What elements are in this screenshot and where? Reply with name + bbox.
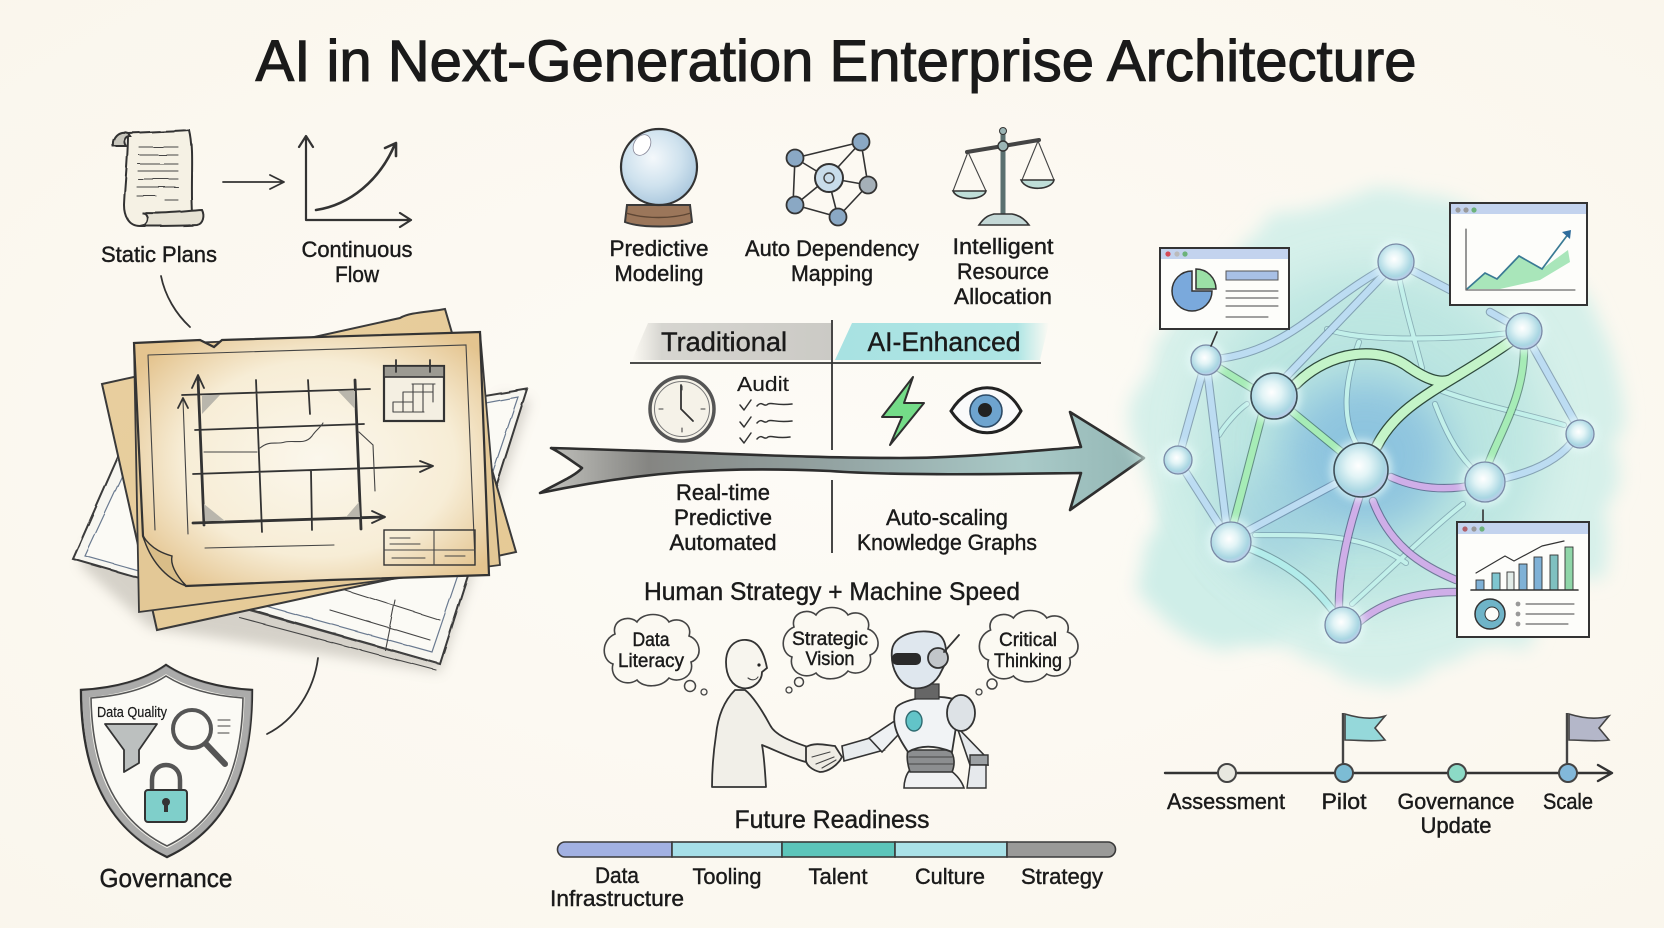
panel: human and machine [604, 578, 1078, 788]
label: Strategy: Strategy [1021, 864, 1103, 889]
icon: eye [951, 388, 1021, 433]
timeline axis arrow [1165, 765, 1612, 781]
label: Intelligent Resource Allocation: Resource [957, 259, 1049, 284]
label: Auto-scaling Knowledge Graphs: Auto-scaling [886, 505, 1008, 530]
figure: robot [842, 631, 988, 788]
label: Talent: Talent [808, 864, 868, 889]
icon: magnifier [173, 710, 230, 764]
label: Continuous Flow: Continuous [302, 237, 412, 262]
heading: Future Readiness: Future Readiness [734, 806, 930, 834]
dashboard window: pie chart [1160, 248, 1289, 329]
schedule grid drawing [178, 375, 433, 548]
figure: human [712, 640, 808, 787]
label: Intelligent Resource Allocation: Allocation [954, 284, 1052, 309]
blue tubes [1178, 262, 1575, 535]
panel: roadmap timeline [1165, 713, 1612, 838]
arrow: transformation [540, 412, 1144, 510]
label: Real-time Predictive Automated: Automated [670, 530, 776, 555]
label: Data Infrastructure: Infrastructure [550, 886, 684, 911]
connector: plans to document stack [161, 276, 190, 327]
thought bubble: Data Literacy: Data [632, 630, 670, 651]
label: Governance: Governance [100, 863, 232, 893]
label: Data Infrastructure: Data [595, 863, 640, 888]
icon: balance scale [953, 128, 1054, 225]
icon: clock [650, 377, 714, 441]
panel: future readiness [550, 806, 1116, 911]
label: Real-time Predictive Automated: Predictive [674, 505, 772, 530]
label: Continuous Flow: Flow [335, 262, 379, 287]
progress bar: readiness stages [558, 842, 1116, 857]
label: Assessment: Assessment [1167, 789, 1285, 814]
tan middle sheet [134, 332, 500, 612]
icon: growth chart [299, 136, 411, 227]
watercolor background [1135, 195, 1630, 675]
shadow under stack [80, 395, 530, 672]
milestone flag: Scale [1567, 713, 1609, 765]
label: Pilot: Pilot [1322, 789, 1366, 814]
thought bubble: Strategic Vision [783, 608, 878, 693]
main parchment sheet [134, 332, 489, 586]
icon: governance shield [81, 665, 252, 857]
label: Scale: Scale [1543, 789, 1593, 814]
node glow [1160, 240, 1598, 647]
heading: Human Strategy + Machine Speed: Human Strategy + Machine Speed [644, 578, 1020, 606]
green tubes [1296, 339, 1514, 446]
label: Culture: Culture [915, 864, 985, 889]
tan back sheet [102, 309, 516, 630]
network edges [1178, 262, 1575, 625]
label: Intelligent Resource Allocation [952, 234, 1054, 309]
label: Auto Dependency Mapping: Mapping [791, 261, 873, 286]
thin links [1219, 262, 1564, 604]
icon: crystal ball [621, 129, 697, 226]
panel: static plans to continuous flow [101, 130, 412, 327]
label: Tooling: Tooling [692, 864, 762, 889]
thought bubble: Critical Thinking: Critical [999, 630, 1057, 651]
illustration: stacked legacy blueprints [73, 309, 530, 672]
label: Real-time Predictive Automated [670, 480, 776, 555]
label: Auto-scaling Knowledge Graphs [857, 505, 1037, 555]
purple tubes [1339, 477, 1475, 622]
arrow: static to flow [223, 175, 284, 189]
icon: audit checklist [737, 374, 792, 443]
label: Real-time Predictive Automated: Real-time [676, 480, 770, 505]
label: Data Infrastructure [550, 863, 684, 911]
label: Auto-scaling Knowledge Graphs: Knowledge Graphs [857, 530, 1037, 555]
icon: paper scroll [113, 130, 203, 226]
network nodes [1164, 244, 1594, 643]
thought bubble: Data Literacy [604, 614, 707, 695]
figure: handshake [806, 744, 842, 772]
title block [384, 530, 475, 565]
icon: lightning bolt [882, 377, 924, 445]
header: Traditional [632, 323, 831, 360]
title: AI in Next-Generation Enterprise Architecture [256, 29, 1416, 94]
thought bubble: Critical Thinking: Thinking [994, 651, 1062, 672]
connectors to windows [1211, 332, 1483, 522]
icon: dependency network [786, 134, 876, 226]
label: Data Quality: Data Quality [97, 705, 168, 721]
connector: governance to stack [267, 658, 318, 734]
thought bubble: Critical Thinking [976, 610, 1078, 695]
panel: knowledge network [1135, 195, 1630, 675]
label: Static Plans: Static Plans [101, 242, 217, 267]
label: Predictive Modeling: Modeling [614, 261, 704, 286]
white back sheets [73, 389, 527, 670]
dashboard window: line chart [1450, 203, 1587, 305]
label: Auto Dependency Mapping [745, 236, 919, 286]
thought bubble: Strategic Vision: Strategic [792, 629, 868, 650]
panel: AI capabilities [610, 128, 1054, 309]
icon: teal padlock [145, 765, 187, 822]
label: Predictive Modeling [610, 236, 708, 286]
milestone flag: Pilot [1343, 713, 1385, 765]
label: Continuous Flow [302, 237, 412, 287]
header: AI-Enhanced [835, 323, 1049, 360]
panel: governance [81, 658, 318, 893]
thought bubble: Data Literacy: Literacy [618, 651, 684, 672]
label: Governance Update: Update [1420, 813, 1492, 838]
milestone nodes [1218, 764, 1577, 782]
header: AI-Enhanced: AI-Enhanced [868, 327, 1020, 357]
icon: audit checklist: Audit [737, 374, 789, 396]
icon: funnel [105, 724, 157, 772]
label: Auto Dependency Mapping: Auto Dependency [745, 236, 919, 261]
teal tubes [1231, 542, 1343, 625]
thought bubble: Strategic Vision: Vision [806, 649, 854, 670]
icon: calendar [384, 360, 444, 421]
label: Governance Update: Governance [1398, 789, 1514, 814]
dashboard window: bar chart [1457, 522, 1589, 637]
header: Traditional: Traditional [661, 327, 787, 357]
label: Governance Update [1398, 789, 1514, 838]
label: Intelligent Resource Allocation: Intelligent [952, 234, 1054, 259]
label: Predictive Modeling: Predictive [610, 236, 708, 261]
panel: traditional vs AI-enhanced comparison [540, 320, 1144, 555]
